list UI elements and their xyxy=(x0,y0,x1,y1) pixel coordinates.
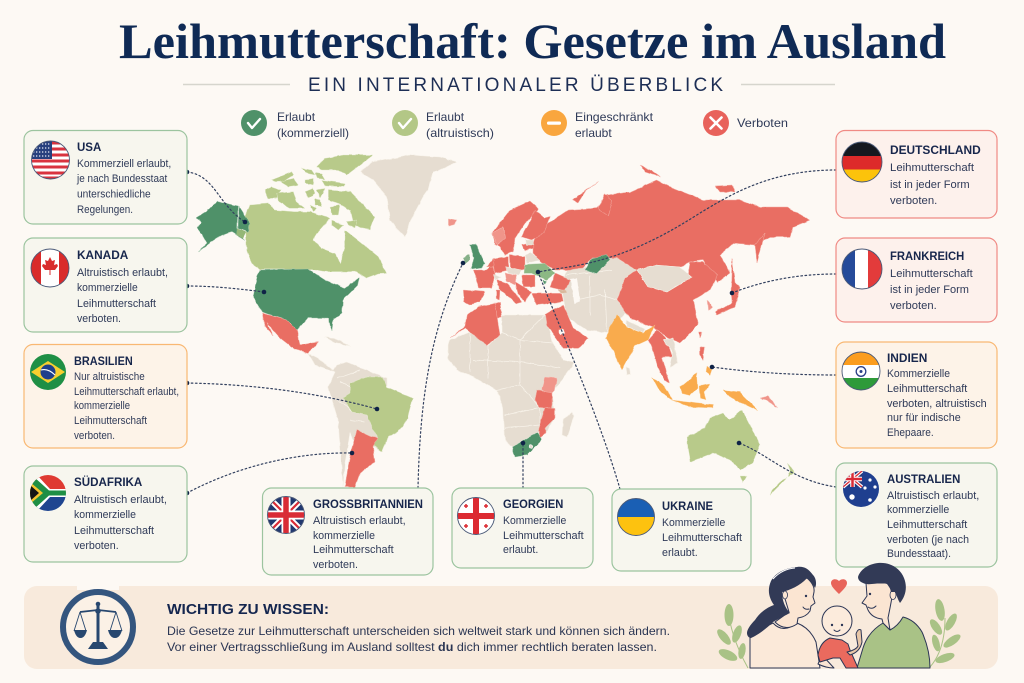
card: Indien: nur für indische xyxy=(887,412,961,424)
icon: scales of justice xyxy=(63,592,133,662)
card: Ukraine: Kommerzielle xyxy=(662,517,725,529)
card: Suedafrika xyxy=(24,466,187,562)
card: Deutschland: verboten. xyxy=(890,195,937,207)
card: Deutschland: DEUTSCHLAND xyxy=(890,143,981,157)
europe, north africa, middle east xyxy=(448,201,610,348)
card: Ukraine: Leihmutterschaft xyxy=(662,532,742,544)
card: Kanada: KANADA xyxy=(77,248,129,262)
card: Suedafrika: kommerzielle xyxy=(74,509,136,521)
card: Grossbritannien: verboten. xyxy=(313,559,358,571)
card: Suedafrika: verboten. xyxy=(74,540,119,552)
right leaves xyxy=(928,598,962,667)
legend item: verboten: Verboten xyxy=(737,116,788,130)
card: Suedafrika: Leihmutterschaft xyxy=(74,525,154,537)
flag: Georgien xyxy=(457,497,495,535)
legend item: erlaubt kommerziell: Erlaubt xyxy=(277,110,316,124)
card: USA: USA xyxy=(77,140,102,154)
flag: Deutschland xyxy=(842,142,882,182)
card: Georgien: Leihmutterschaft xyxy=(503,530,584,542)
card: USA: unterschiedliche xyxy=(77,188,151,200)
legend item: erlaubt kommerziell: (kommerziell) xyxy=(277,126,349,140)
card: Indien: Ehepaare. xyxy=(887,427,934,439)
card: Grossbritannien xyxy=(262,488,433,575)
card: Ukraine xyxy=(612,489,751,571)
card: Indien: verboten, altruistisch xyxy=(887,398,987,410)
panel: wichtig zu wissen: WICHTIG ZU WISSEN: xyxy=(167,602,329,618)
north america xyxy=(196,155,457,353)
panel: wichtig zu wissen: Die Gesetze zur Leihmutterschaft unterscheiden sich weltweit stark und können sich ändern. xyxy=(167,624,670,638)
legend item: eingeschraenkt: erlaubt xyxy=(575,126,612,140)
flag: Brasilien xyxy=(30,354,66,390)
woman xyxy=(747,567,820,668)
legend item: erlaubt altruistisch: Erlaubt xyxy=(426,110,465,124)
card: Frankreich xyxy=(836,238,997,322)
card: Indien xyxy=(836,342,997,448)
subtitle: EIN INTERNATIONALER ÜBERBLICK xyxy=(308,75,723,96)
legend item: erlaubt altruistisch xyxy=(392,110,494,140)
legend xyxy=(241,110,788,140)
card: Suedafrika: Altruistisch erlaubt, xyxy=(74,494,167,506)
card: Ukraine: UKRAINE xyxy=(662,499,713,513)
card: Deutschland xyxy=(836,130,997,218)
card: Brasilien: Nur altruistische xyxy=(74,371,145,383)
south america xyxy=(308,353,413,487)
card: Kanada: Altruistisch erlaubt, xyxy=(77,267,168,279)
card: Australien: verboten (je nach xyxy=(887,534,969,546)
flag: Ukraine xyxy=(617,498,655,536)
card: USA: je nach Bundesstaat xyxy=(76,173,167,185)
card: Australien: Leihmutterschaft xyxy=(887,519,967,531)
world map xyxy=(196,155,810,495)
card: USA xyxy=(24,130,187,224)
heart xyxy=(831,579,847,594)
card: Frankreich: Leihmutterschaft xyxy=(890,268,973,280)
card: Australien xyxy=(836,463,997,567)
flag: Suedafrika xyxy=(30,475,66,511)
card: USA: Regelungen. xyxy=(77,204,133,216)
card: Grossbritannien: GROSSBRITANNIEN xyxy=(313,497,423,511)
left leaves xyxy=(715,604,748,668)
flag: Kanada xyxy=(31,249,69,287)
card: Deutschland: Leihmutterschaft xyxy=(890,162,974,174)
flag: Indien xyxy=(842,352,880,391)
card: Frankreich: verboten. xyxy=(890,300,937,312)
card: Ukraine: erlaubt. xyxy=(662,547,698,559)
connector lines xyxy=(185,170,836,495)
title: Leihmutterschaft: Gesetze im Ausland xyxy=(119,13,946,69)
panel: wichtig zu wissen xyxy=(24,584,998,669)
legend item: eingeschraenkt xyxy=(541,110,654,140)
flag: Australien xyxy=(843,471,879,507)
card: Frankreich: FRANKREICH xyxy=(890,249,964,263)
legend item: eingeschraenkt: Eingeschränkt xyxy=(575,110,654,124)
card: Georgien: erlaubt. xyxy=(503,544,538,556)
card: Suedafrika: SÜDAFRIKA xyxy=(74,474,143,489)
legend item: erlaubt altruistisch: (altruistisch) xyxy=(426,126,494,140)
legend item: erlaubt kommerziell xyxy=(241,110,349,140)
card: Australien: kommerzielle xyxy=(887,504,949,516)
card: Brasilien: verboten. xyxy=(74,430,115,442)
card: Kanada: kommerzielle xyxy=(77,282,138,294)
card: Brasilien: BRASILIEN xyxy=(74,354,133,368)
panel: wichtig zu wissen: Vor einer Vertragsschließung im Ausland solltest du dich immer rechtlich beraten lassen. xyxy=(167,640,657,654)
card: Australien: Bundesstaat). xyxy=(887,548,951,560)
card: Grossbritannien: kommerzielle xyxy=(313,530,375,542)
card: Australien: Altruistisch erlaubt, xyxy=(887,490,979,502)
card: Georgien: Kommerzielle xyxy=(503,515,566,527)
card: Australien: AUSTRALIEN xyxy=(887,472,960,486)
card: Frankreich: ist in jeder Form xyxy=(890,284,969,296)
oceania xyxy=(687,410,795,495)
card: Georgien: GEORGIEN xyxy=(503,497,563,511)
card: Kanada xyxy=(24,238,187,332)
card: Grossbritannien: Altruistisch erlaubt, xyxy=(313,515,406,527)
card: Indien: INDIEN xyxy=(887,351,927,365)
legend item: verboten xyxy=(703,110,788,136)
flag: Frankreich xyxy=(842,249,882,289)
card: Indien: Kommerzielle xyxy=(887,368,950,380)
card: Georgien xyxy=(452,488,593,568)
africa xyxy=(448,315,575,457)
baby xyxy=(818,606,862,668)
man xyxy=(857,563,930,668)
card: Brasilien: Leihmutterschaft xyxy=(74,415,147,427)
flag: Grossbritannien xyxy=(267,496,305,534)
card: Brasilien: kommerzielle xyxy=(74,400,130,412)
card: Brasilien: Leihmutterschaft erlaubt, xyxy=(74,386,179,398)
card: USA: Kommerziell erlaubt, xyxy=(77,158,171,170)
asia xyxy=(533,165,810,410)
card: Kanada: Leihmutterschaft xyxy=(77,298,156,310)
flag: USA xyxy=(31,141,71,179)
canada xyxy=(245,155,387,278)
card: Brasilien xyxy=(24,344,187,448)
card: Kanada: verboten. xyxy=(77,313,121,325)
illustration: family xyxy=(715,563,962,668)
card: Grossbritannien: Leihmutterschaft xyxy=(313,544,394,556)
card: Deutschland: ist in jeder Form xyxy=(890,179,970,191)
card: Indien: Leihmutterschaft xyxy=(887,383,967,395)
